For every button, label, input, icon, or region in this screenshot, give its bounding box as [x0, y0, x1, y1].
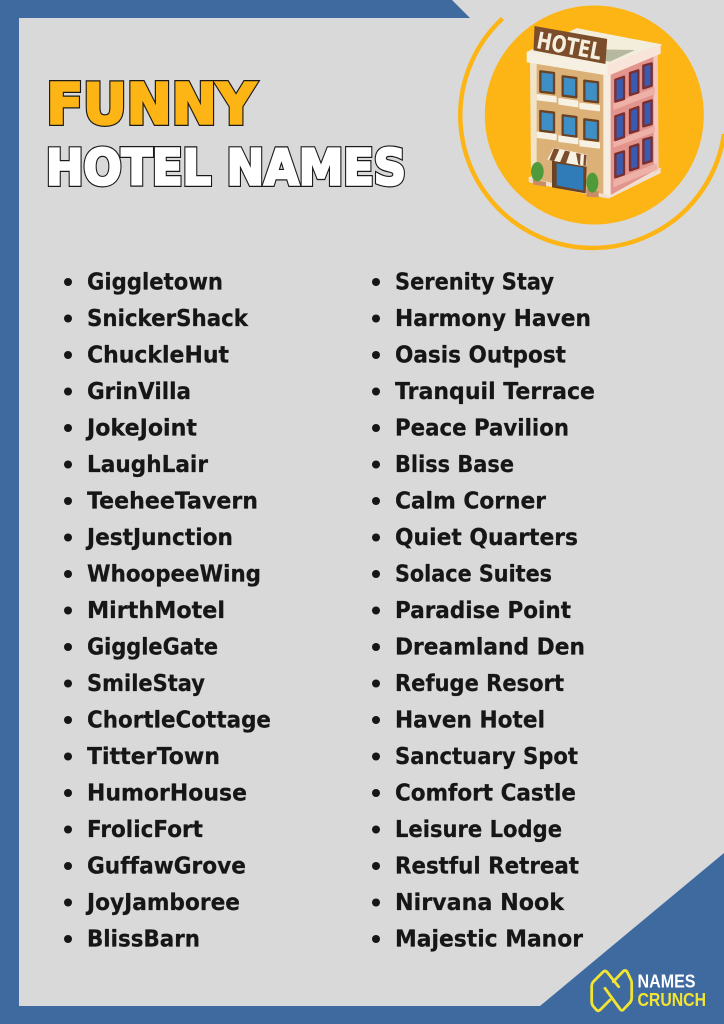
- right names: Quiet Quarters: [395, 525, 578, 551]
- logo text: NAMES: NAMES: [638, 972, 696, 992]
- left names: JoyJamboree: [85, 890, 240, 916]
- blue frame bottom corner: [0, 853, 724, 1024]
- list: left column: [64, 270, 271, 952]
- right names: Majestic Manor: [395, 926, 584, 952]
- right names: Solace Suites: [395, 562, 552, 588]
- window ledges: [537, 95, 599, 148]
- orange arc: [460, 18, 724, 248]
- left names: SmileStay: [87, 671, 205, 697]
- icon: hotel building: [527, 26, 661, 198]
- left names: ChortleCottage: [87, 708, 271, 734]
- left names: ChuckleHut: [87, 342, 229, 368]
- left names: TitterTown: [87, 744, 220, 770]
- left names: GuffawGrove: [87, 854, 246, 880]
- right names: Refuge Resort: [395, 671, 564, 697]
- right names: Comfort Castle: [395, 780, 576, 806]
- right names: Leisure Lodge: [395, 817, 562, 843]
- title line: HOTEL NAMES: HOTEL NAMES: [46, 140, 406, 197]
- awning: [548, 148, 587, 166]
- left names: WhoopeeWing: [87, 562, 261, 588]
- left names: GiggleGate: [87, 634, 218, 660]
- list: right column: [372, 270, 595, 952]
- title line: HOTEL NAMES: HOTEL NAMES: [46, 140, 406, 197]
- front windows: [540, 71, 598, 141]
- title line: FUNNY: FUNNY: [46, 73, 257, 138]
- right names: Haven Hotel: [395, 708, 545, 734]
- right wall bands: [613, 87, 657, 187]
- hotel sign: HOTEL: [535, 26, 604, 66]
- icon: hotel badge: [460, 6, 724, 248]
- title line: FUNNY: FUNNY: [46, 73, 257, 138]
- side windows: [615, 63, 652, 177]
- left names: FrolicFort: [87, 817, 203, 843]
- right names: Dreamland Den: [395, 634, 585, 660]
- left names: SnickerShack: [87, 306, 249, 332]
- right names: Peace Pavilion: [395, 416, 569, 442]
- right names: Serenity Stay: [395, 270, 554, 296]
- right names: Restful Retreat: [395, 854, 579, 880]
- right names: Tranquil Terrace: [395, 379, 595, 405]
- icon: N monogram: [592, 970, 632, 1011]
- right names: Nirvana Nook: [395, 890, 565, 916]
- right names: Sanctuary Spot: [395, 744, 578, 770]
- right names: [395, 270, 595, 952]
- right names: Bliss Base: [395, 452, 514, 478]
- left bullets: [64, 278, 72, 943]
- right names: Oasis Outpost: [395, 342, 566, 368]
- left names: GrinVilla: [87, 379, 191, 405]
- right names: Paradise Point: [395, 598, 571, 624]
- left names: JokeJoint: [85, 416, 197, 442]
- left names: BlissBarn: [87, 926, 200, 952]
- left names: Giggletown: [87, 270, 223, 296]
- left names: [85, 270, 271, 952]
- right bullets: [372, 278, 380, 943]
- blue frame top and left: [0, 0, 470, 1006]
- orange circle: [485, 6, 704, 224]
- left names: JestJunction: [85, 525, 233, 551]
- left names: LaughLair: [87, 452, 209, 478]
- logo: Names Crunch: [592, 970, 706, 1011]
- left names: MirthMotel: [87, 598, 225, 624]
- left names: HumorHouse: [87, 780, 247, 806]
- right names: Calm Corner: [395, 488, 547, 514]
- right names: Harmony Haven: [395, 306, 591, 332]
- logo text: CRUNCH: CRUNCH: [638, 990, 706, 1010]
- plants: [531, 162, 599, 197]
- door: [552, 161, 587, 193]
- title: [46, 73, 406, 197]
- left names: TeeheeTavern: [87, 488, 258, 514]
